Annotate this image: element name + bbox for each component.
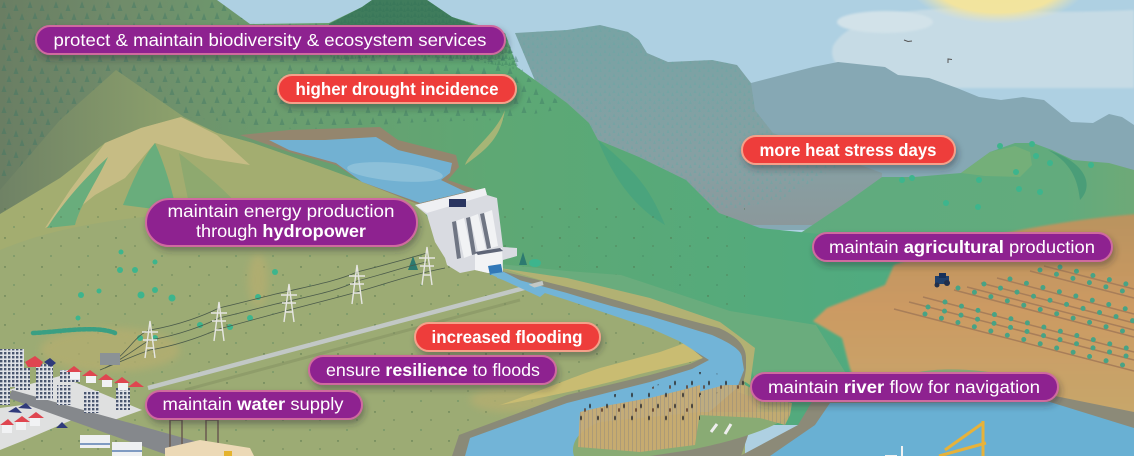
label: maintain river flow for navigation — [751, 373, 1058, 401]
label: increased flooding: increased flooding — [432, 327, 582, 347]
power lines — [100, 253, 445, 370]
olive hill patch — [179, 153, 236, 208]
birds — [904, 40, 952, 63]
label: higher drought incidence: higher drought incidence — [296, 79, 499, 99]
right bank band — [480, 262, 850, 395]
reservoir — [240, 127, 477, 205]
label: higher drought incidence — [278, 75, 516, 103]
farmland — [813, 213, 1134, 450]
pine trees and bushes — [33, 250, 541, 341]
egrets — [711, 424, 731, 434]
label: ensure resilience to floods — [309, 356, 556, 384]
crop rows — [894, 266, 1134, 371]
main hillside — [0, 0, 900, 425]
road — [8, 390, 205, 456]
stream on hillside — [465, 110, 505, 165]
label: protect biodiversity — [36, 26, 505, 54]
label: protect biodiversity: protect & maintain biodiversity & ecosystem services — [54, 30, 487, 50]
reed tips — [578, 372, 745, 425]
boat mast — [885, 446, 902, 456]
label: maintain water supply — [146, 391, 362, 419]
sun and haze — [832, 0, 1134, 88]
label: maintain agricultural production: maintain agricultural production — [829, 237, 1095, 257]
town — [0, 349, 144, 456]
forested grey mountain — [515, 25, 882, 225]
label: maintain energy production — [146, 199, 417, 246]
label: maintain river flow for navigation: maintain river flow for navigation — [768, 377, 1040, 397]
crane — [939, 421, 986, 456]
tractor — [934, 273, 950, 288]
tan hill peak — [45, 117, 250, 228]
green field edge — [905, 369, 1020, 388]
forest texture on hillside — [0, 0, 567, 190]
tan ground patches — [40, 254, 550, 412]
right green hills — [790, 141, 1134, 300]
label: ensure resilience to floods: ensure resilience to floods — [326, 360, 540, 380]
dam — [415, 188, 545, 297]
label: maintain energy production: maintain energy production — [168, 201, 394, 221]
dark forested peak — [329, 0, 480, 27]
reed island — [573, 372, 792, 456]
flood levee — [148, 283, 543, 388]
dense tree texture — [250, 0, 520, 70]
olive hill — [0, 70, 540, 330]
label: maintain agricultural production — [813, 233, 1112, 261]
peninsula gold band — [500, 343, 703, 405]
label: maintain energy production: through hydropower — [196, 221, 366, 241]
plazas — [0, 376, 142, 450]
label: more heat stress days: more heat stress days — [760, 140, 937, 160]
power station — [165, 420, 254, 456]
levee shadow — [185, 300, 520, 390]
green hill patches — [47, 143, 177, 228]
ground speckles — [0, 205, 745, 456]
label: increased flooding — [415, 323, 600, 351]
label: maintain water supply: maintain water supply — [162, 394, 344, 414]
label: more heat stress days — [742, 136, 955, 164]
transmission towers — [142, 247, 435, 358]
lake — [740, 395, 1134, 456]
central green shading — [598, 140, 665, 225]
reeds — [578, 385, 700, 452]
reeds right — [698, 385, 792, 425]
far mountain — [751, 62, 1134, 230]
river — [452, 270, 760, 456]
ground plain — [0, 203, 745, 456]
olive strip along river — [500, 268, 755, 385]
front hill — [0, 117, 450, 300]
